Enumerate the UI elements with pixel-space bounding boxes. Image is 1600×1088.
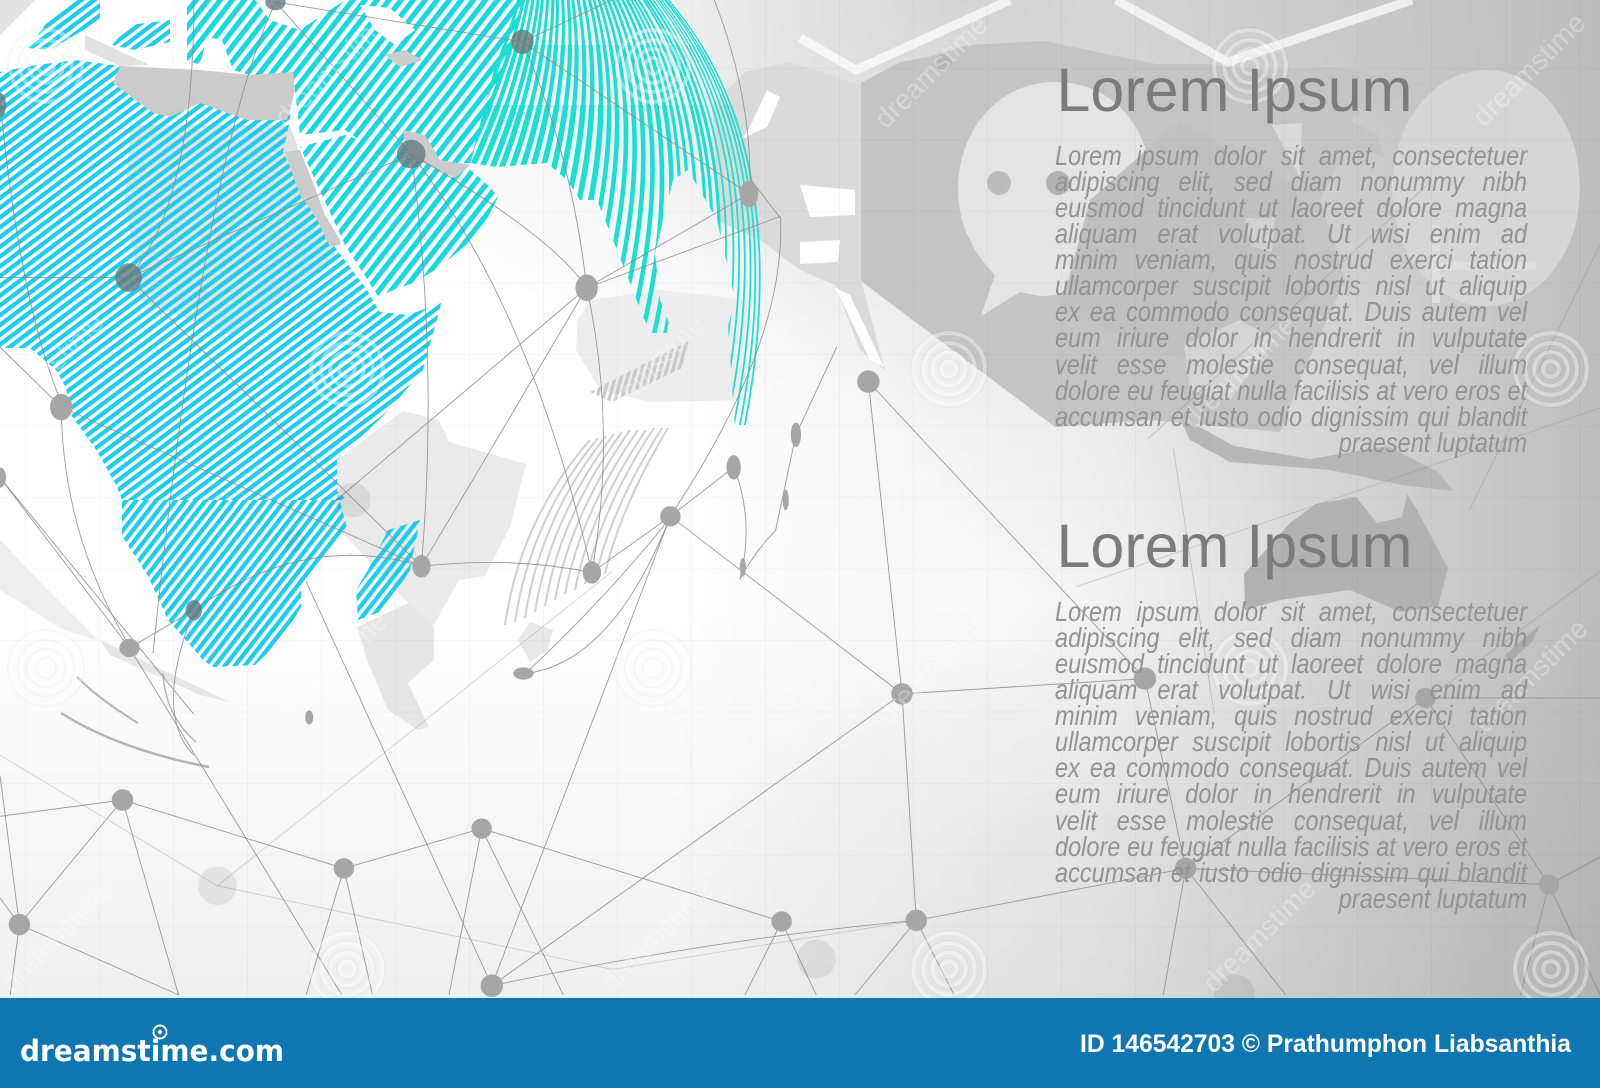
globe: sahara tint <box>125 125 335 335</box>
watermark text: dreamstime <box>594 873 720 998</box>
text block bottom: dolore eu feugiat nulla facilisis at vero eros et <box>1055 831 1527 862</box>
text block top: ex ea commodo consequat. Duis autem vel <box>1055 296 1527 327</box>
text block top: accumsan et iusto odio dignissim qui blandit <box>1055 401 1527 432</box>
footer logo: dreamstime.com <box>20 1034 284 1068</box>
text block bottom: minim veniam, quis nostrud exerci tation <box>1055 700 1527 731</box>
globe: grey hatched arcs behind <box>505 428 668 625</box>
text block top: euismod tincidunt ut laoreet dolore magna <box>1055 192 1527 223</box>
text block top: velit esse molestie consequat, vel illum <box>1055 349 1527 380</box>
text block bottom <box>1055 596 1528 914</box>
watermark text: dreamstime <box>1466 7 1592 132</box>
text block bottom: adipiscing elit, sed diam nonummy nibh <box>1055 622 1527 653</box>
text block top <box>1055 140 1528 458</box>
panel: grey hexagon with map <box>861 41 1428 432</box>
text block bottom: euismod tincidunt ut laoreet dolore magna <box>1055 648 1527 679</box>
watermark text: dreamstime <box>1176 309 1302 434</box>
hexagon white outline strokes <box>800 0 1412 70</box>
text block top: ullamcorper suscipit lobortis nisl ut aliquip <box>1055 270 1527 301</box>
watermark text: dreamstime <box>868 9 994 134</box>
text block top: aliquam erat volutpat. Ut wisi enim ad <box>1055 218 1527 249</box>
text block bottom: velit esse molestie consequat, vel illum <box>1055 805 1527 836</box>
text block bottom: eum iriure dolor in hendrerit in vulputate <box>1055 778 1527 809</box>
text block bottom: ullamcorper suscipit lobortis nisl ut aliquip <box>1055 726 1527 757</box>
text block top: praesent luptatum <box>1339 427 1527 458</box>
text block top: eum iriure dolor in hendrerit in vulputate <box>1055 322 1527 353</box>
globe: grey swooshes lower left <box>0 540 230 767</box>
text block top: minim veniam, quis nostrud exerci tation <box>1055 244 1527 275</box>
text block top: dolore eu feugiat nulla facilisis at vero eros et <box>1055 375 1527 406</box>
icon: speech bubble left <box>958 82 1310 400</box>
text block bottom: praesent luptatum <box>1339 883 1527 914</box>
text block top: adipiscing elit, sed diam nonummy nibh <box>1055 166 1527 197</box>
text block bottom: ex ea commodo consequat. Duis autem vel <box>1055 752 1527 783</box>
heading top: Lorem Ipsum <box>1056 56 1412 124</box>
globe: europe and middle east striped <box>0 0 525 296</box>
footer credit: ID 146542703 © Prathumphon Liabsanthia <box>1080 1030 1572 1058</box>
globe: africa striped <box>0 60 441 667</box>
seas: grey overlays <box>113 50 470 247</box>
watermark text: dreamstime <box>1196 873 1322 998</box>
watermark text: dreamstime <box>1468 613 1594 738</box>
text block bottom: accumsan et iusto odio dignissim qui blandit <box>1055 857 1527 888</box>
text block bottom: aliquam erat volutpat. Ut wisi enim ad <box>1055 674 1527 705</box>
heading bottom: Lorem Ipsum <box>1056 512 1412 580</box>
icon: speech bubble right <box>1392 70 1580 306</box>
text block top: Lorem ipsum dolor sit amet, consectetuer <box>1055 140 1527 171</box>
footer bar <box>0 998 1600 1088</box>
text block bottom: Lorem ipsum dolor sit amet, consectetuer <box>1055 596 1527 627</box>
watermark text: dreamstime <box>268 605 394 730</box>
world map: grey continents <box>337 62 1540 730</box>
watermark text: dreamstime <box>870 605 996 730</box>
watermark text: dreamstime <box>584 309 710 434</box>
globe: asia curved stripes <box>470 0 761 426</box>
watermark text: dreamstime <box>268 7 394 132</box>
